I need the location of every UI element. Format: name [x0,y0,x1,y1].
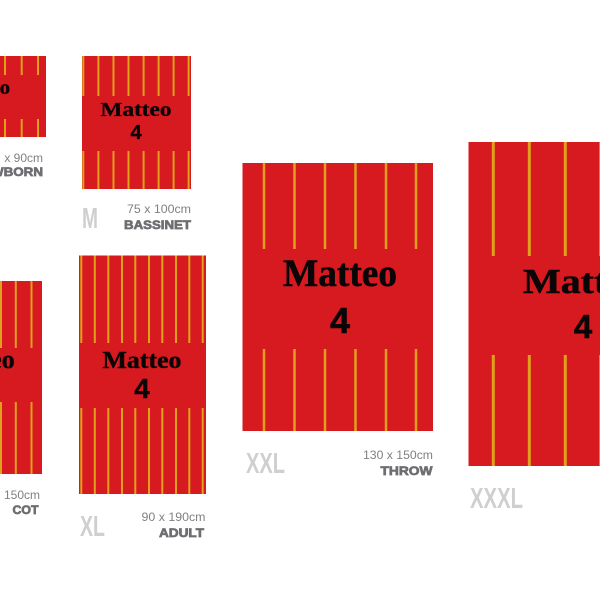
panel: newborn blanket [0,56,46,137]
panel: largest blanket [468,142,600,466]
adult size label [142,510,206,540]
bassinet size letter: M [82,203,98,235]
newborn size label [0,151,43,179]
throw size label [363,448,433,478]
panel: throw blanket: Matteo [283,252,397,295]
cot size label: 150cm [4,488,40,502]
throw size label: THROW [380,464,433,478]
cot size label: COT [12,503,39,517]
adult size letter: XL [80,511,105,543]
panel: throw blanket [242,163,433,431]
newborn size label: x 90cm [4,151,43,165]
adult size label: ADULT [159,526,205,540]
adult size label: 90 x 190cm [142,510,206,524]
panel: bassinet blanket [82,56,191,189]
throw size label: 130 x 150cm [363,448,433,462]
bassinet size label: BASSINET [124,218,192,232]
throw size letter: XXL [246,448,285,480]
panel: adult blanket: Matteo [102,348,182,374]
panel: throw blanket: 4 [330,300,350,341]
panel: adult blanket: 4 [134,373,150,404]
panel: bassinet blanket: Matteo [100,99,172,121]
bassinet size label: 75 x 100cm [127,202,191,216]
panel: adult blanket [79,256,206,494]
largest size letter: XXXL [470,483,523,515]
bassinet size label [124,202,192,232]
panel: largest blanket: 4 [574,308,593,345]
panel: cot blanket [0,281,42,474]
panel: bassinet blanket: 4 [130,122,142,144]
cot size label [4,488,40,517]
